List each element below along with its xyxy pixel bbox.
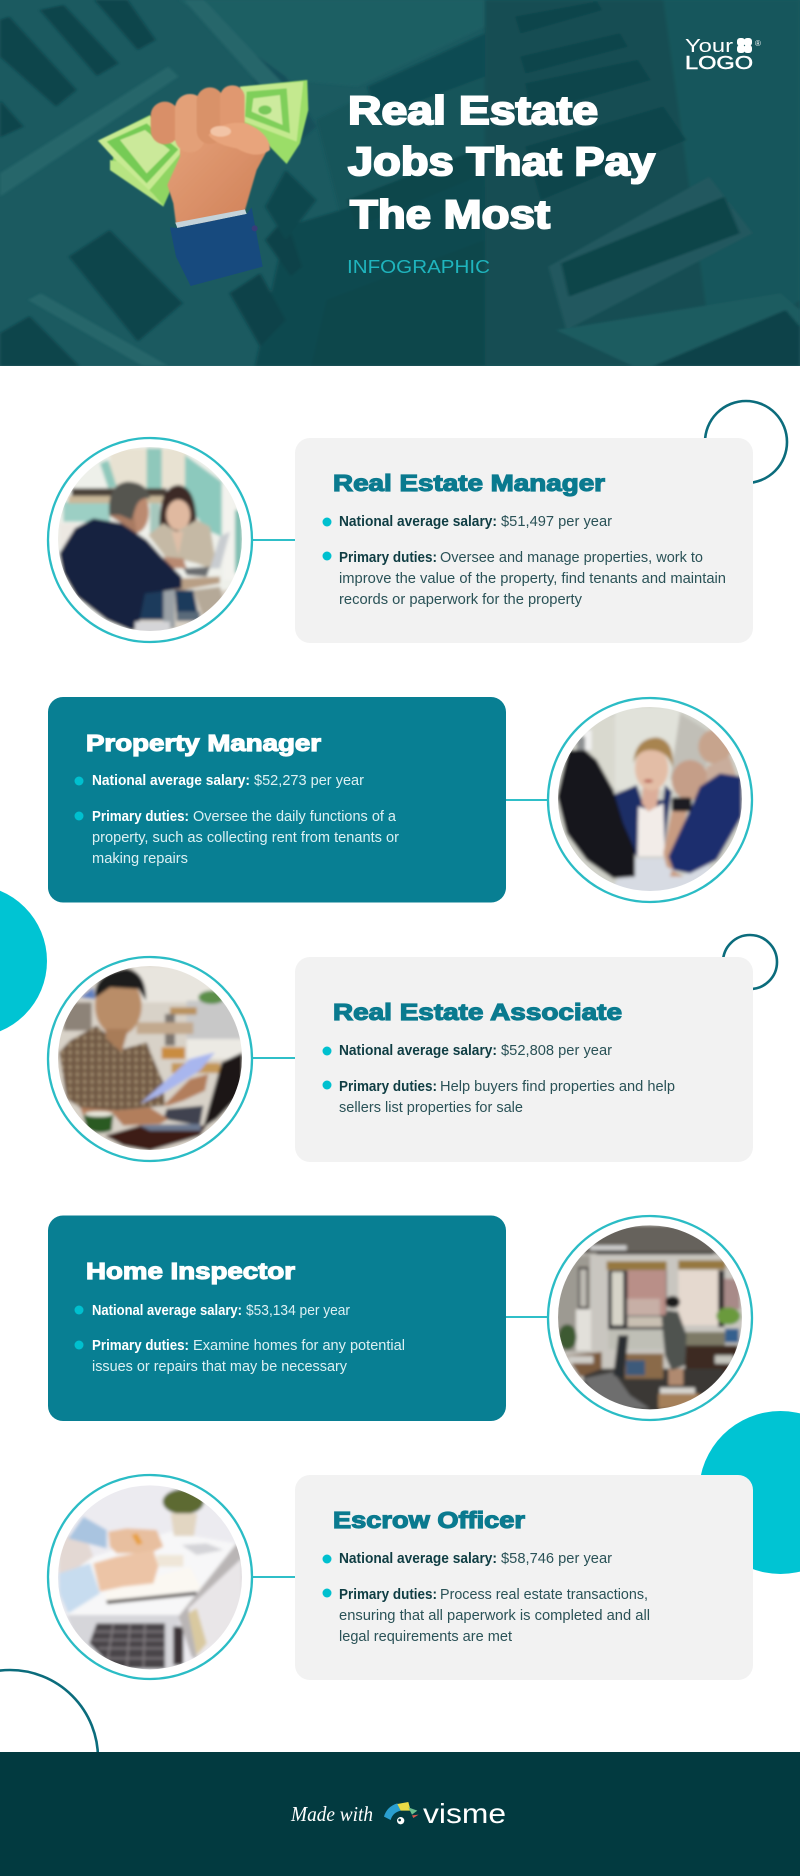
- salary bullet: [74, 773, 364, 789]
- duties bullet: Examine homes for any potential: [193, 1338, 405, 1354]
- salary bullet: National average salary:: [92, 773, 250, 789]
- duties bullet: Process real estate transactions,: [440, 1587, 648, 1603]
- card background: [295, 957, 753, 1162]
- connector: [253, 1057, 296, 1059]
- panel: Escrow Officer: [48, 1475, 753, 1680]
- salary bullet: $52,808 per year: [501, 1043, 612, 1059]
- duties bullet: issues or repairs that may be necessary: [92, 1359, 348, 1375]
- duties bullet: records or paperwork for the property: [339, 592, 583, 608]
- heading: Real Estate Associate: [333, 999, 622, 1025]
- title: [348, 89, 656, 237]
- duties bullet: Primary duties:: [339, 1079, 437, 1095]
- duties bullet: Oversee and manage properties, work to: [440, 550, 703, 566]
- card background: [48, 697, 506, 902]
- salary bullet: $53,134 per year: [246, 1303, 350, 1319]
- panel: Real Estate Associate: [48, 957, 753, 1162]
- decorative teal circle left: [0, 885, 47, 1037]
- photo: smiling man with laptop: [58, 966, 242, 1150]
- salary bullet: [74, 1303, 350, 1319]
- duties bullet: [322, 1079, 675, 1116]
- duties bullet: ensuring that all paperwork is completed and all: [339, 1608, 650, 1624]
- fist: [151, 85, 270, 224]
- heading: Home Inspector: [86, 1258, 295, 1284]
- heading: Real Estate Manager: [333, 470, 605, 496]
- salary bullet: National average salary:: [92, 1303, 242, 1319]
- salary bullet: $52,273 per year: [254, 773, 364, 789]
- footer: [0, 1752, 800, 1876]
- salary bullet: [322, 514, 612, 530]
- connector: [253, 1576, 296, 1578]
- title: The Most: [350, 193, 550, 237]
- duties bullet: Primary duties:: [339, 550, 437, 566]
- panel: Home Inspector: [48, 1216, 752, 1422]
- salary bullet: National average salary:: [339, 1043, 497, 1059]
- salary bullet: $51,497 per year: [501, 514, 612, 530]
- duties bullet: [74, 809, 399, 867]
- duties bullet: property, such as collecting rent from tenants or: [92, 830, 399, 846]
- salary bullet: National average salary:: [339, 1551, 497, 1567]
- decorative ring bottom left: [0, 1670, 98, 1846]
- title: Real Estate: [348, 89, 598, 133]
- logo placeholder: LOGO: [685, 53, 753, 73]
- duties bullet: [322, 1587, 650, 1645]
- salary bullet: $58,746 per year: [501, 1551, 612, 1567]
- photo ring: [48, 1475, 252, 1679]
- photo ring: [48, 957, 252, 1161]
- heading: Escrow Officer: [333, 1507, 525, 1533]
- visme wordmark: visme: [423, 1798, 506, 1829]
- duties bullet: Primary duties:: [92, 809, 189, 825]
- duties bullet: Primary duties:: [92, 1338, 189, 1354]
- salary bullet: [322, 1551, 612, 1567]
- decorative teal circle right: [699, 1411, 800, 1574]
- panel: Property Manager: [48, 697, 752, 902]
- title: Jobs That Pay: [348, 140, 656, 184]
- shirt cuff edge: [175, 209, 247, 228]
- decorative small ring right: [723, 935, 777, 989]
- photo ring: [548, 1216, 752, 1420]
- photo: businesswoman at meeting: [558, 707, 742, 891]
- duties bullet: making repairs: [92, 851, 188, 867]
- photo: man and woman at laptop: [58, 447, 242, 631]
- header banner: [0, 0, 800, 366]
- duties bullet: sellers list properties for sale: [339, 1100, 523, 1116]
- hand holding cash: [98, 80, 308, 286]
- card background: [295, 438, 753, 643]
- duties bullet: improve the value of the property, find tenants and maintain: [339, 571, 726, 587]
- decorative ring top right: [705, 401, 787, 483]
- connector: [505, 799, 548, 801]
- duties bullet: [322, 550, 726, 608]
- photo: hands writing by laptop: [58, 1486, 242, 1670]
- logo placeholder: [686, 38, 761, 70]
- duties bullet: Help buyers find properties and help: [440, 1079, 675, 1095]
- subtitle: INFOGRAPHIC: [347, 256, 490, 277]
- cash bundles: [98, 80, 308, 207]
- panel: Real Estate Manager: [48, 438, 753, 643]
- card background: [295, 1475, 753, 1680]
- duties bullet: Oversee the daily functions of a: [193, 809, 397, 825]
- duties bullet: legal requirements are met: [339, 1629, 512, 1645]
- photo: loft interior with person at window: [558, 1225, 742, 1410]
- visme logo icon: [384, 1802, 419, 1824]
- duties bullet: Primary duties:: [339, 1587, 437, 1603]
- connector: [505, 1316, 548, 1318]
- header background: building photo: [0, 0, 800, 366]
- logo placeholder: ®: [755, 39, 761, 48]
- card background: [48, 1216, 506, 1421]
- logo placeholder: Your: [685, 36, 733, 56]
- sleeve: [170, 207, 263, 286]
- photo ring: [548, 698, 752, 902]
- made with text: Made with: [290, 1802, 373, 1826]
- heading: Property Manager: [86, 730, 321, 756]
- salary bullet: National average salary:: [339, 514, 497, 530]
- duties bullet: [74, 1338, 405, 1375]
- photo ring: [48, 438, 252, 642]
- salary bullet: [322, 1043, 612, 1059]
- connector: [253, 539, 296, 541]
